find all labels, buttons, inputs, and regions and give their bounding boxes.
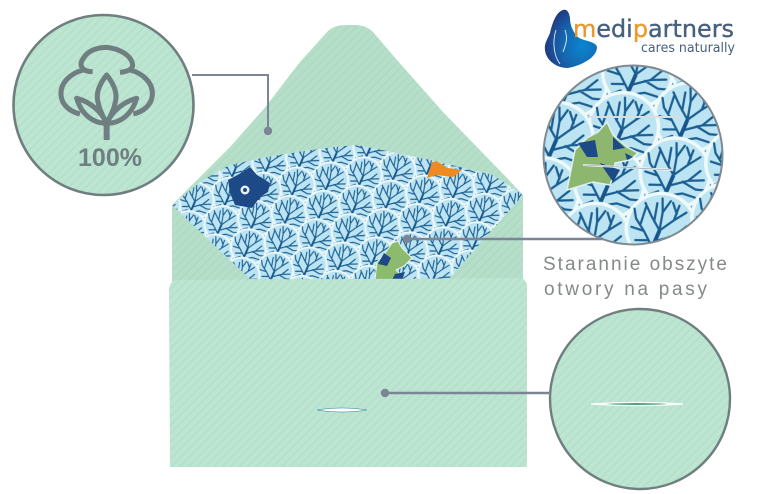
caption line 1: Starannie obszyte xyxy=(543,254,727,275)
belt slit xyxy=(317,408,367,412)
callout: slit detail circle xyxy=(550,309,730,489)
patterned lining xyxy=(172,145,523,281)
magnified pattern xyxy=(544,66,722,244)
logo tagline: cares naturally xyxy=(641,41,735,56)
logo wordmark: medipartners xyxy=(573,15,734,43)
green fox motif xyxy=(375,241,412,280)
logo figure xyxy=(554,30,566,64)
product: green blanket xyxy=(169,25,527,467)
magnified fox xyxy=(567,122,638,190)
logo: medipartners xyxy=(545,10,735,68)
label: 100%: 100% xyxy=(78,144,142,172)
blanket hood flap xyxy=(172,25,523,300)
logo blob xyxy=(545,10,597,68)
leader line: stitched holes xyxy=(403,235,603,243)
magnified slit xyxy=(591,402,683,406)
bear motif xyxy=(228,167,270,208)
orange fox motif xyxy=(427,162,462,178)
cotton circle xyxy=(14,15,194,195)
callout: fox detail circle xyxy=(540,62,730,252)
leader line: slit xyxy=(381,389,550,397)
leader line: cotton xyxy=(192,75,272,135)
stitched holes xyxy=(583,117,680,170)
callout: 100% cotton xyxy=(14,15,194,195)
caption: stitched belt openings xyxy=(543,254,727,300)
lower pocket flap xyxy=(169,278,527,467)
caption line 2: otwory na pasy xyxy=(544,279,708,300)
icon: cotton plant xyxy=(61,47,152,140)
